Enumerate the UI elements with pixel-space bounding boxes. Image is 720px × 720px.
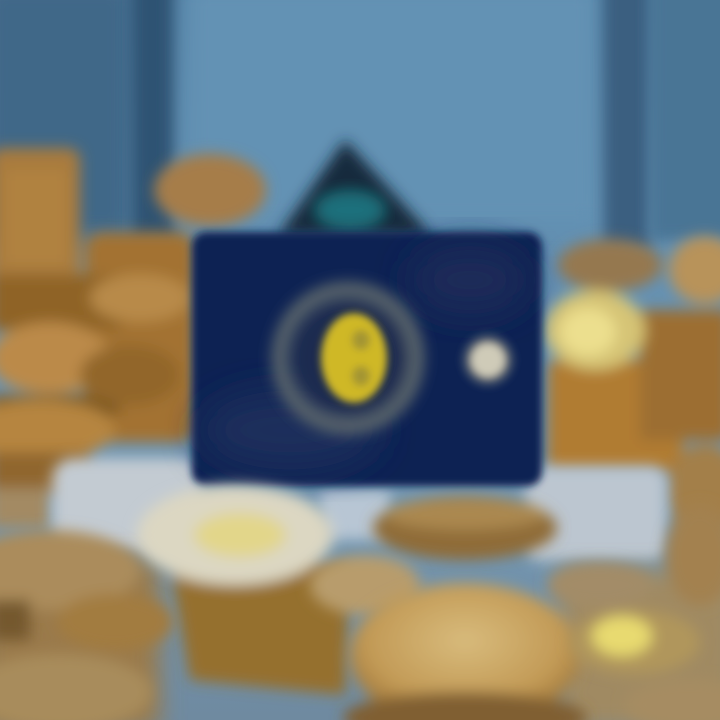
- foreground coins: left: [0, 530, 420, 720]
- emblem ring: [280, 290, 416, 426]
- coin stacks: left: [0, 148, 266, 528]
- foreground coins: right: [548, 505, 720, 720]
- foreground cookie: [373, 496, 557, 560]
- foreground bowl: [137, 485, 350, 695]
- small white dot: [462, 334, 514, 386]
- foreground large coin: [343, 583, 587, 720]
- white plates behind card: [52, 458, 667, 561]
- dark navy card: [192, 232, 542, 486]
- coin stacks: right: [545, 236, 720, 536]
- yellow coin symbol: [321, 313, 387, 403]
- card pyramid top: [278, 140, 432, 236]
- foreground base: [0, 560, 720, 720]
